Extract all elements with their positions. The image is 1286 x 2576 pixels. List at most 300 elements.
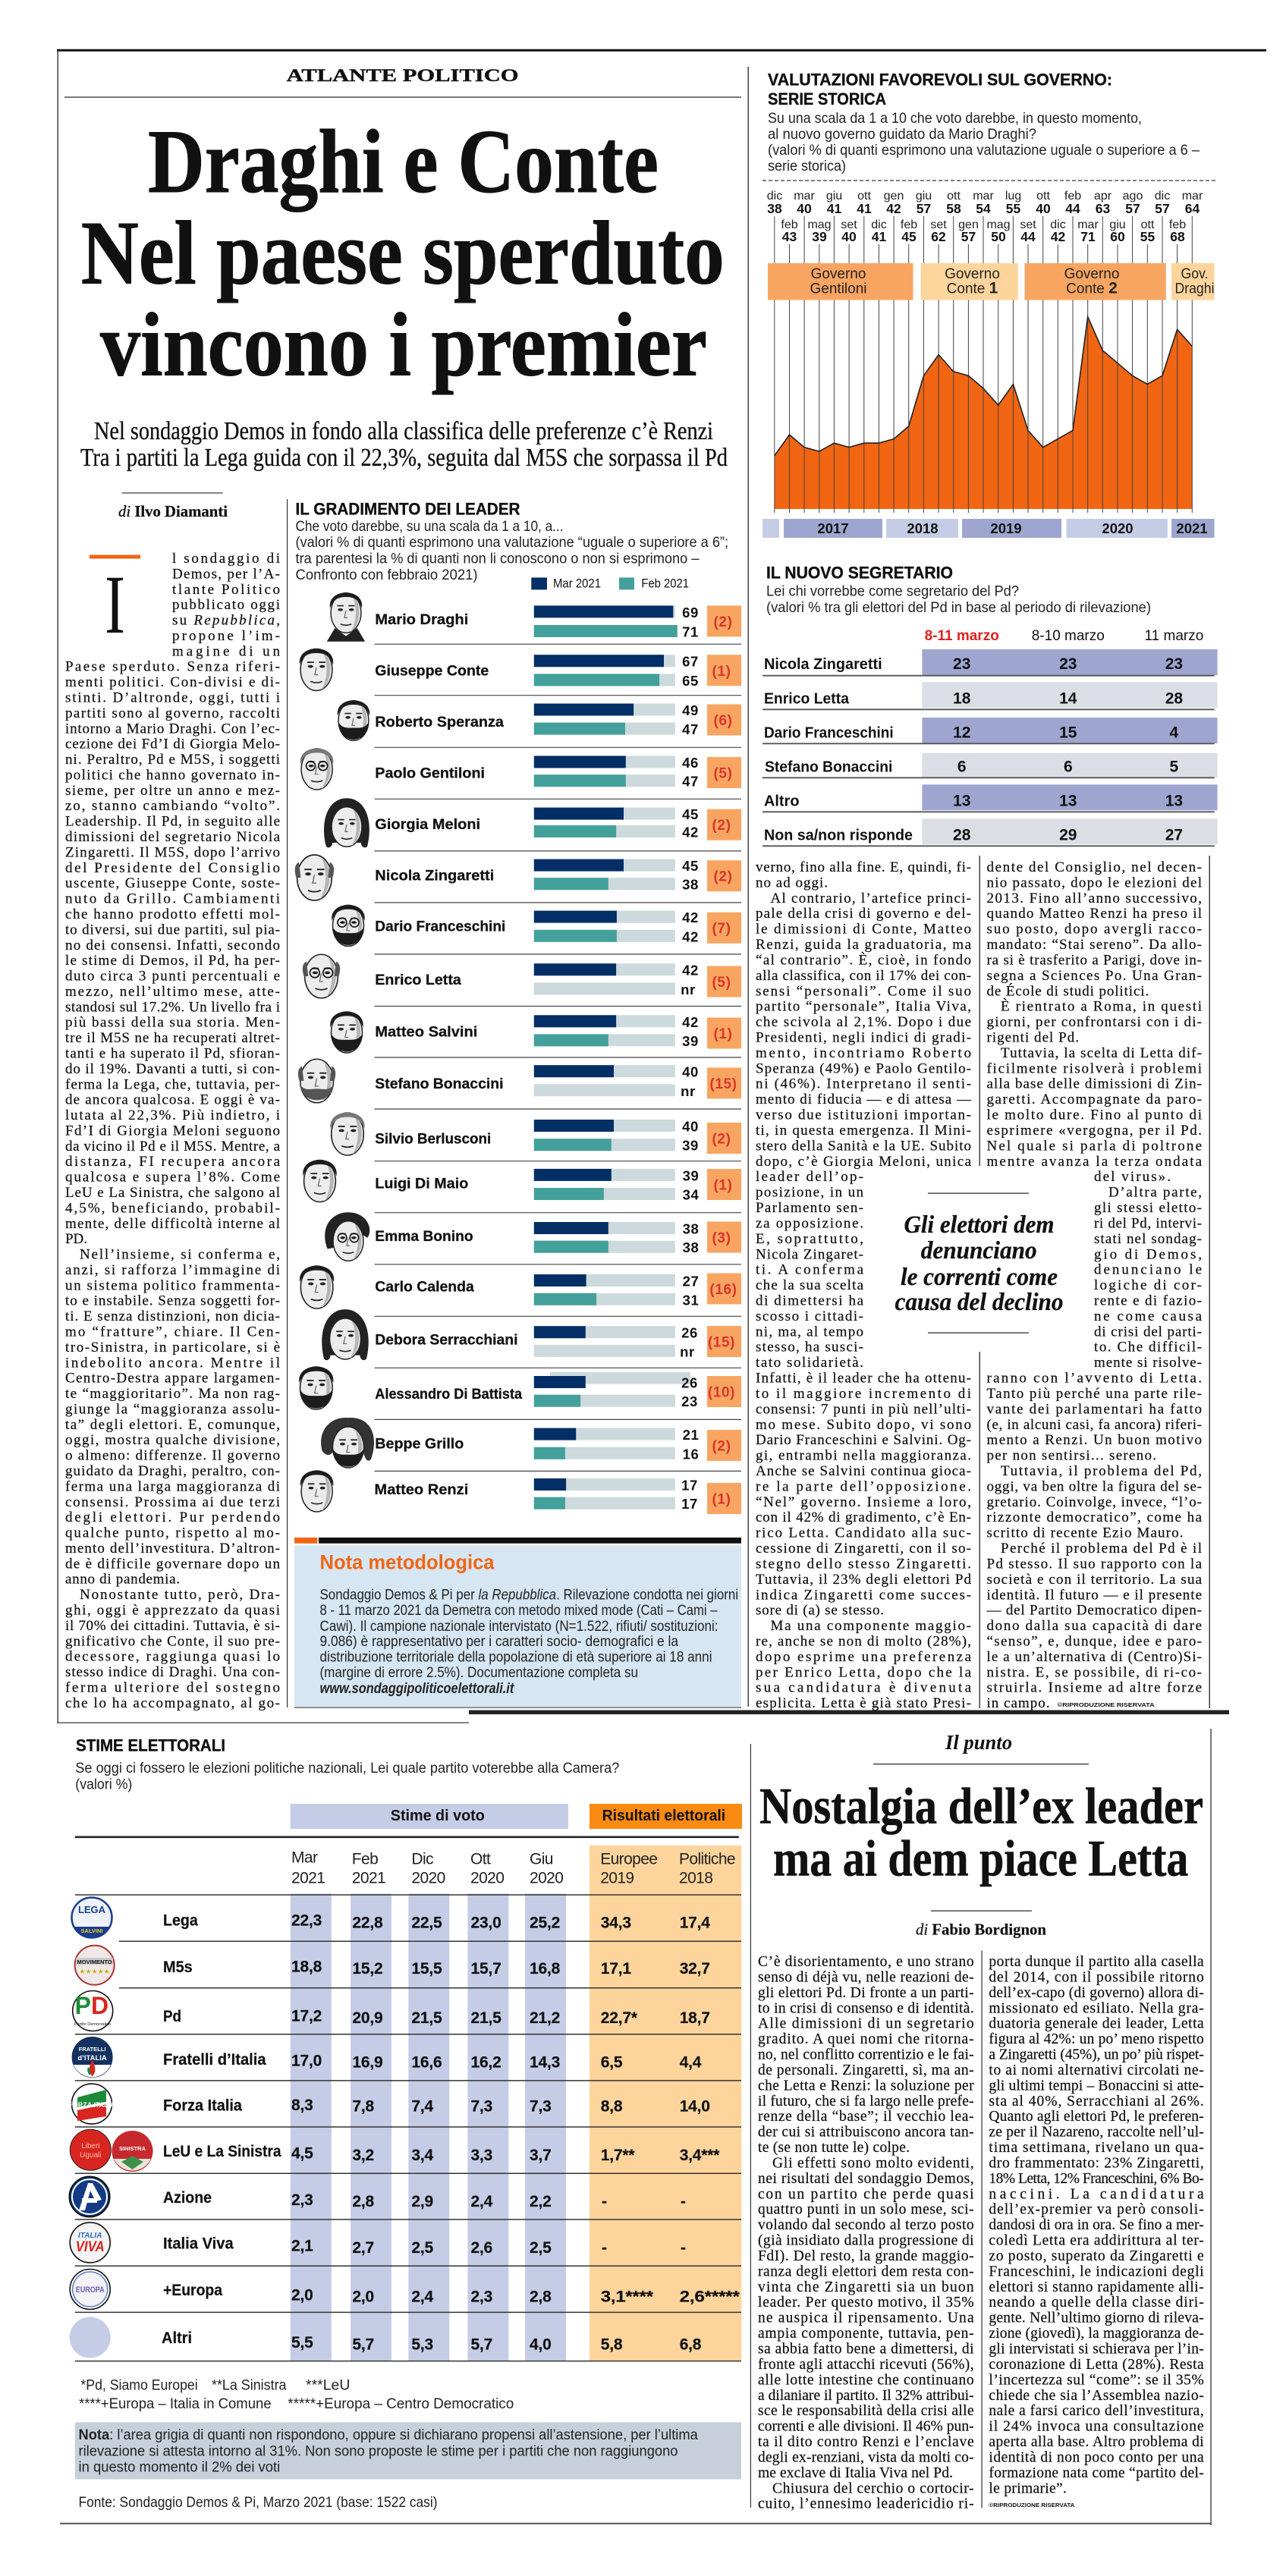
article text: Diamanti column: tro-Sinistra, in particolare, si è xyxy=(65,1340,280,1356)
row: Alessandro Di Battista xyxy=(299,1366,741,1419)
row: M5s: M5s xyxy=(163,1959,193,1976)
article text: second column: ti, in questa emergenza. Il Mini- xyxy=(756,1123,971,1139)
row: Stefano Bonaccini: 5 xyxy=(1170,758,1179,775)
article text: Bordignon right column: to ai nomi alternativi circolati ne- xyxy=(989,2062,1204,2078)
icon: portrait Conte xyxy=(300,649,333,690)
row: Dario Franceschini: (7) xyxy=(712,921,731,937)
month and value labels xyxy=(767,190,1203,244)
row: Dario Franceschini xyxy=(764,724,1179,741)
nota text: Cawi). Il campione nazionale intervistato (N=1.522, rifiuti/ sostituzioni: xyxy=(320,1619,718,1635)
icon: logo M5s xyxy=(75,1946,115,1985)
row: Matteo Salvini xyxy=(330,1011,741,1057)
month and value labels: 55 xyxy=(1140,229,1155,244)
legend: Feb 2021 xyxy=(641,576,689,590)
article text: Bordignon left column: a dilaniare il partito. Il 32% attribui- xyxy=(758,2388,974,2404)
icon: logo M5s: ★★★★★ xyxy=(79,1968,110,1975)
article text: second column: ni (46%). Interpretano il senti- xyxy=(756,1076,971,1092)
article text: third column: to. Che difficil- xyxy=(1094,1340,1202,1356)
article text: Diamanti column: consensi. Prossima ai due terzi xyxy=(65,1494,280,1510)
copyright note: ©RIPRODUZIONE RISERVATA xyxy=(1058,1701,1155,1708)
row: Enrico Letta: Enrico Letta xyxy=(375,972,461,988)
row: Pd: 21,2 xyxy=(530,2009,560,2027)
nota heading: Nota metodologica xyxy=(320,1550,495,1573)
month and value labels: 41 xyxy=(827,201,841,216)
row: Paolo Gentiloni: Paolo Gentiloni xyxy=(375,765,485,781)
article text: Diamanti column: ghi, oggi è apprezzato da quasi xyxy=(65,1603,280,1619)
icon: logo +Europa: EUROPA xyxy=(76,2285,105,2295)
article text: third column: oggi, va ben oltre la figura del se- xyxy=(986,1478,1202,1494)
row: Alessandro Di Battista: 26 xyxy=(681,1374,698,1391)
article text: second column: alla classifica, con il 17% dei con- xyxy=(756,968,971,984)
row: LeU e La Sinistra: 3,4*** xyxy=(680,2147,720,2164)
icon: portrait Salvini xyxy=(330,1011,363,1053)
article text: Bordignon left column: volando dal secondo al terzo posto xyxy=(758,2217,974,2233)
article text: Diamanti column: Zingaretti. Il M5S, dopo l’arrivo xyxy=(65,844,280,860)
article text: Bordignon left column: gradito. A quei nomi che ritorna- xyxy=(758,2031,974,2047)
chart description: al nuovo governo guidato da Mario Draghi? xyxy=(768,127,1036,143)
article text: Bordignon left column: de personali. Zingaretti, sì, ma an- xyxy=(758,2062,974,2078)
row: +Europa: +Europa xyxy=(163,2282,222,2299)
row: Altri: 6,8 xyxy=(680,2336,702,2354)
article text: third column: quando Matteo Renzi ha preso il xyxy=(986,906,1202,922)
article text: second column: Tuttavia, il 23% degli elettori Pd xyxy=(756,1572,971,1588)
row: Altri: 5,5 xyxy=(291,2334,313,2351)
government bands: Conte 2 xyxy=(1066,280,1118,297)
article text: Diamanti column: no dei consensi. Infatti, secondo xyxy=(65,938,280,953)
article text: Bordignon right column: gli ultimi tempi – Bonaccini si atte- xyxy=(989,2078,1204,2094)
row: +Europa: 3,1**** xyxy=(601,2288,654,2305)
row: Forza Italia xyxy=(68,2084,710,2124)
row: Luigi Di Maio xyxy=(303,1160,741,1213)
article text: third column: ne come causa xyxy=(1094,1308,1203,1324)
article text: third column: mente si risolve- xyxy=(1094,1355,1202,1371)
article text: Bordignon left column: cuito, l’ennesimo leadericidio ri- xyxy=(758,2496,974,2512)
row: Stefano Bonaccini xyxy=(298,1059,741,1109)
row: Forza Italia: 7,8 xyxy=(352,2098,375,2116)
year bands: 2020 xyxy=(1102,520,1134,536)
row: Matteo Renzi: Matteo Renzi xyxy=(375,1481,468,1498)
column strips xyxy=(291,1846,741,2361)
row: Lega: 23,0 xyxy=(470,1914,502,1931)
footnotes: **La Sinistra xyxy=(212,2378,287,2394)
government bands: Conte 1 xyxy=(947,280,998,297)
column heads xyxy=(291,1849,735,1887)
article text: Diamanti column: zo, stanno cambiando “volto”. xyxy=(65,798,280,814)
table description: Se oggi ci fossero le elezioni politiche nazionali, Lei quale partito voterebbe alla Camera? xyxy=(75,1761,619,1776)
article text: Bordignon left column: correnti e alle divisioni. Il 46% pun- xyxy=(758,2419,974,2435)
article text: second column: re la parte dell’opposizione. xyxy=(756,1478,971,1494)
row: Carlo Calenda: Carlo Calenda xyxy=(375,1279,474,1296)
article text: second column: che scivola al 2,1%. Dopo i due xyxy=(756,1014,971,1030)
month and value labels: feb xyxy=(901,218,917,231)
article text: second column: gi, entrambi nella maggioranza. xyxy=(756,1448,971,1464)
article text: third column: mento a Renzi. Un buon motivo xyxy=(986,1432,1202,1448)
row: Mario Draghi xyxy=(327,592,741,644)
row: Matteo Renzi: 17 xyxy=(681,1478,698,1493)
row: Roberto Speranza: 47 xyxy=(682,721,699,737)
row: Pd: Pd xyxy=(163,2008,181,2025)
row: +Europa: 2,6***** xyxy=(680,2288,740,2305)
column heads: 2018 xyxy=(679,1869,712,1887)
row: Pd: 22,7* xyxy=(601,2009,638,2027)
month and value labels: ott xyxy=(857,190,871,203)
icon: logo Italia Viva: ITALIA xyxy=(78,2232,102,2240)
article text: Diamanti column: do il 19%. Davanti a tutti, si con- xyxy=(65,1061,280,1077)
column heads: Feb xyxy=(352,1851,378,1868)
row: Lega: 25,2 xyxy=(530,1914,560,1931)
article text: Diamanti column: che hanno prodotto effetti mol- xyxy=(65,906,280,922)
month and value labels: mag xyxy=(807,218,832,231)
panel: stime elettorali xyxy=(68,1736,742,2511)
row: Nicola Zingaretti xyxy=(764,655,1183,673)
chart description: (valori % di quanti esprimono una valutazione uguale o superiore a 6 – xyxy=(768,143,1200,159)
row: Alessandro Di Battista: 23 xyxy=(681,1393,698,1409)
article text: second column: ni, ma, al tempo xyxy=(756,1324,863,1340)
panel description: (valori % di quanti esprimono una valutazione “uguale o superiore a 6”; xyxy=(296,535,728,551)
article text: Diamanti column: LeU e La Sinistra, che salgono al xyxy=(65,1185,280,1201)
row: M5s: 15,5 xyxy=(411,1960,442,1978)
row: LeU e La Sinistra xyxy=(70,2129,720,2172)
month and value labels: 57 xyxy=(961,229,976,244)
article text: third column: Perché il problema del Pd è il xyxy=(1001,1541,1202,1557)
article text: Diamanti column: anzi, si rafforza l’immagine di xyxy=(65,1262,280,1278)
row: Altro: 13 xyxy=(953,792,970,809)
icon: portrait Draghi xyxy=(327,592,365,642)
row: Azione: - xyxy=(602,2193,607,2210)
article text: Diamanti column: propone l’im- xyxy=(172,628,280,644)
year bands xyxy=(762,519,1215,538)
table column heads: 8-10 marzo xyxy=(1032,628,1105,644)
article text: second column: mo mese. Subito dopo, vi sono xyxy=(756,1417,971,1433)
row: Lega xyxy=(71,1898,710,1938)
month and value labels: gen xyxy=(958,218,979,231)
row: Italia Viva: - xyxy=(602,2239,607,2257)
row: Azione: 2,2 xyxy=(530,2193,552,2210)
icon: logo Fratelli d'Italia: d’ITALIA xyxy=(77,2054,107,2062)
row: LeU e La Sinistra: 3,3 xyxy=(470,2147,492,2164)
column heads: 2020 xyxy=(470,1869,504,1887)
row: Paolo Gentiloni: 47 xyxy=(682,774,699,790)
row: Alessandro Di Battista: (10) xyxy=(708,1385,735,1400)
row: Matteo Salvini: 42 xyxy=(682,1014,699,1030)
row: Enrico Letta xyxy=(764,690,1183,707)
article text: Diamanti column: Leadership. Il Pd, in seguito alle xyxy=(65,814,280,830)
article text: third column: dono dalla sua capacità di dare xyxy=(986,1618,1202,1634)
row: Fratelli d'Italia: 4,4 xyxy=(680,2054,702,2072)
article text: third column: di crisi del parti- xyxy=(1094,1324,1202,1340)
icon: logo Italia Viva: VIVA xyxy=(76,2239,105,2255)
table column heads: 8-11 marzo xyxy=(925,628,999,644)
article text: Bordignon right column: dro frammentato: 23% Zingaretti, xyxy=(989,2155,1204,2171)
copyright note: ©RIPRODUZIONE RISERVATA xyxy=(989,2502,1075,2508)
article text: second column: Speranza (49%) e Paolo Gentilo- xyxy=(756,1060,971,1076)
row: Dario Franceschini: 12 xyxy=(953,724,970,741)
article text: Diamanti column: stinti. D’altronde, oggi, tutti i xyxy=(65,690,280,706)
article text: second column: indica Zingaretti come succes- xyxy=(756,1587,971,1603)
article text: third column: società e con il territorio. La sua xyxy=(986,1572,1203,1588)
article text: Bordignon right column: naccini. La candidatura xyxy=(989,2186,1204,2202)
row: Enrico Letta: 28 xyxy=(1165,690,1183,707)
article text: second column: mento, incontriamo Roberto xyxy=(756,1045,971,1061)
month and value labels: 54 xyxy=(976,201,991,216)
icon: portrait Renzi xyxy=(300,1470,333,1512)
row: Stefano Bonaccini: 6 xyxy=(1064,758,1073,775)
article text: second column: Presidenti, negli indici di gradi- xyxy=(756,1030,971,1046)
article text: Bordignon right column: ze per il Nazareno, raccolte nell’ul- xyxy=(989,2125,1204,2141)
article text: Diamanti column: lutata al 22,3%. Più indietro, i xyxy=(65,1107,280,1123)
article text: second column: Anche se Salvini continua gioca- xyxy=(756,1463,971,1479)
article text: Bordignon left column: fronte agli attacchi ricevuti (56%), xyxy=(758,2357,974,2373)
row: Paolo Gentiloni: (5) xyxy=(713,766,733,781)
article text: Diamanti column: ferma una larga maggioranza di xyxy=(65,1478,280,1494)
icon: portrait Letta xyxy=(303,954,340,998)
icon: logo Liberi e Uguali xyxy=(70,2129,111,2170)
row: M5s: 15,2 xyxy=(352,1960,382,1978)
article text: Diamanti column: ferma ulteriore del sostegno xyxy=(65,1679,280,1695)
article text: Diamanti column: tlante Politico xyxy=(172,582,280,598)
month and value labels: ott xyxy=(947,190,961,203)
article text: Diamanti column: magine di un xyxy=(172,643,281,659)
article text: third column: Tanto più perché una parte rile- xyxy=(986,1386,1202,1402)
article text: third column: scritto di recente Ezio Mauro. xyxy=(986,1525,1184,1541)
article text: third column: È rientrato a Roma, in questi xyxy=(1001,998,1202,1015)
article text: Bordignon right column: sta al 40%, Serracchiani al 26%. xyxy=(989,2094,1204,2109)
row: Carlo Calenda: 31 xyxy=(683,1292,699,1308)
row: Forza Italia: Forza Italia xyxy=(163,2097,242,2115)
article text: second column: sore di (a) se stesso. xyxy=(756,1603,884,1619)
row: Roberto Speranza xyxy=(338,700,741,747)
article text: Bordignon right column: dell’ex-premier va però consoli- xyxy=(989,2202,1204,2218)
month and value labels: 42 xyxy=(1051,229,1065,244)
icon: logo Pd: P xyxy=(75,1992,91,2019)
icon: portrait Grillo xyxy=(321,1418,374,1468)
row: Azione: 2,9 xyxy=(411,2193,433,2210)
article text: Bordignon left column: no, nel conflitto correntizio e le fai- xyxy=(758,2047,974,2063)
row: Stefano Bonaccini: Stefano Bonaccini xyxy=(375,1076,504,1092)
row: Debora Serracchiani xyxy=(322,1309,741,1368)
article text: second column: dopo esprime una preferenza xyxy=(756,1649,972,1665)
month and value labels: 64 xyxy=(1185,201,1200,216)
icon: portrait Franceschini xyxy=(332,905,365,946)
note box xyxy=(75,2422,741,2479)
article text: Diamanti column: su Repubblica, xyxy=(172,613,280,629)
article text: Diamanti column: l sondaggio di xyxy=(172,551,280,567)
icon: logo Lega: SALVINI xyxy=(80,1927,103,1934)
row: Giorgia Meloni xyxy=(324,798,741,851)
article text: Bordignon right column: Franceschini, le indicazioni degli xyxy=(989,2263,1204,2279)
article text: second column: di dimettersi ha xyxy=(756,1293,864,1308)
article text: Bordignon right column: porta dunque il partito alla casella xyxy=(989,1954,1204,1970)
panel: valutazioni favorevoli sul governo xyxy=(762,71,1215,538)
article text: Diamanti column: duto circa 3 punti percentuali e xyxy=(65,969,280,985)
row: LeU e La Sinistra: 3,4 xyxy=(411,2147,434,2164)
table description xyxy=(766,584,1151,616)
icon: logo Lega xyxy=(71,1898,112,1938)
row: M5s: 15,7 xyxy=(470,1960,502,1978)
icon: portrait Calenda xyxy=(300,1265,334,1308)
article text: second column: E, soprattutto, xyxy=(756,1231,863,1247)
row: Italia Viva: 2,1 xyxy=(291,2238,313,2255)
row: Alessandro Di Battista: Alessandro Di Battista xyxy=(375,1386,522,1403)
footnotes: ****+Europa – Italia in Comune xyxy=(79,2396,272,2412)
article text: third column: gio di Demos, xyxy=(1094,1246,1202,1262)
article text: Diamanti column: guidato da Draghi, peraltro, con- xyxy=(65,1463,280,1479)
article text: Diamanti column: ti. E senza distinzioni, non dicia- xyxy=(65,1308,280,1324)
row: Silvio Berlusconi: 39 xyxy=(682,1138,699,1154)
article text: Diamanti column: mezzo, nell’ultimo mese, atte- xyxy=(65,984,280,1000)
row: Silvio Berlusconi xyxy=(330,1112,741,1161)
article text: third column: 2013. Fino all’anno successivo, xyxy=(986,891,1202,906)
nota text: 9.086) è rappresentativo per i caratteri socio- demografici e la xyxy=(320,1634,678,1650)
row: +Europa: 2,0 xyxy=(352,2288,374,2305)
article text: Bordignon right column: zo posto, superato da Zingaretti e xyxy=(989,2248,1204,2264)
article text: second column: Al contrario, l’artefice princi- xyxy=(771,891,971,906)
month and value labels: 58 xyxy=(946,201,961,216)
article text: Diamanti column: indebolito ancora. Mentre il xyxy=(65,1355,280,1371)
government bands: Governo xyxy=(1064,266,1119,282)
row: Paolo Gentiloni: 46 xyxy=(682,755,699,771)
month and value labels: 43 xyxy=(782,229,797,244)
article text: second column: cessione di Zingaretti, con il so- xyxy=(756,1541,971,1557)
month and value labels: 57 xyxy=(1155,201,1170,216)
row: Non sa/non risponde: 27 xyxy=(1165,826,1183,843)
article text: Diamanti column: un sistema politico frammenta- xyxy=(65,1277,280,1293)
row: LeU e La Sinistra: 3,2 xyxy=(352,2147,374,2164)
row: Azione: 2,3 xyxy=(291,2191,313,2209)
row: Non sa/non risponde: 29 xyxy=(1059,826,1077,843)
note box: Nota: l’area grigia di quanti non rispondono, oppure si dichiarano propensi all’astensione, per l’ultima xyxy=(79,2427,698,2443)
icon: Altri disc xyxy=(70,2317,111,2358)
article text: Bordignon left column: leader. Per questo motivo, il 35% xyxy=(758,2295,974,2311)
article text: third column: giorni, per confrontarsi con i di- xyxy=(986,1014,1202,1030)
row: Giorgia Meloni: (2) xyxy=(712,818,731,834)
month and value labels: 38 xyxy=(767,201,782,216)
row: +Europa: 2,0 xyxy=(291,2287,313,2304)
article text: Bordignon left column: quattro punti in un solo mese, sci- xyxy=(758,2202,974,2218)
article text: Diamanti column: Fd’I di Giorgia Meloni seguono xyxy=(65,1123,280,1139)
icon: portrait Berlusconi xyxy=(330,1112,365,1155)
article text: third column: Pd stesso. Il suo rapporto con la xyxy=(986,1556,1203,1572)
row: Matteo Salvini: (1) xyxy=(713,1026,733,1042)
article text: second column: stero della Sanità e la UE. Subito xyxy=(756,1138,971,1154)
row: +Europa: 2,8 xyxy=(530,2288,552,2305)
article text: second column: “al contrario”. È, cioè, in fondo xyxy=(756,951,971,968)
row: Matteo Renzi xyxy=(300,1470,741,1514)
icon: logo Italia Viva xyxy=(70,2223,110,2263)
article text: second column: sensi “personali”. Come il suo xyxy=(756,983,971,999)
chart description xyxy=(768,111,1200,174)
table heading: IL NUOVO SEGRETARIO xyxy=(766,564,953,583)
row: Beppe Grillo: Beppe Grillo xyxy=(375,1435,464,1452)
article text: Diamanti column: mo “fratture”, chiare. Il Cen- xyxy=(65,1324,280,1340)
article text: third column: denunciano le xyxy=(1094,1262,1202,1278)
article text: third column: le molto dure. Fino al punto di xyxy=(986,1107,1202,1123)
footnotes: ***LeU xyxy=(306,2378,350,2394)
legend: Mar 2021 xyxy=(553,576,601,590)
row: Nicola Zingaretti: Nicola Zingaretti xyxy=(764,656,882,673)
article text: Bordignon right column: coronazione di Letta (28%). Resta xyxy=(989,2357,1204,2373)
panel description: tra parentesi la % di quanti non li conoscono o non si esprimono – xyxy=(296,551,700,567)
icon: portrait Zingaretti xyxy=(295,855,334,900)
panel description xyxy=(296,519,728,583)
table heading: STIME ELETTORALI xyxy=(76,1736,225,1755)
column heads: 2020 xyxy=(530,1869,563,1887)
row: M5s xyxy=(75,1946,710,1985)
month and value labels: giu xyxy=(826,190,842,203)
row: Mario Draghi: Mario Draghi xyxy=(375,611,468,628)
row: Enrico Letta xyxy=(303,954,741,1006)
article text: Bordignon left column: te (se non tutte le) colpe. xyxy=(758,2140,910,2156)
article text: Bordignon right column: duatoria generale dei leader, Letta xyxy=(989,2016,1204,2032)
article text: Diamanti column: partiti sono al governo, raccolti xyxy=(65,705,280,721)
article text: second column: consensi: 7 punti in più nell’ulti- xyxy=(756,1401,971,1417)
row: Non sa/non risponde xyxy=(764,826,1183,843)
main headline: Nel paese sperduto xyxy=(81,202,725,303)
nota text: (margine di errore 2.5%). Documentazione completa su xyxy=(320,1665,638,1681)
table column heads xyxy=(925,628,1203,644)
panel: nota metodologica xyxy=(294,1538,741,1708)
article text: Bordignon right column: del 2014, con il possibile ritorno xyxy=(989,1969,1204,1985)
month and value labels: mar xyxy=(794,190,815,203)
callout: pull quote xyxy=(895,1192,1064,1334)
row: Italia Viva: - xyxy=(681,2239,686,2257)
article text: Bordignon right column: coledì Letta era addirittura al ter- xyxy=(989,2233,1204,2249)
article text: Bordignon left column: ta il dito contro Renzi e l’enclave xyxy=(758,2434,974,2450)
month and value labels: giu xyxy=(1109,218,1126,231)
row: Italia Viva: 2,7 xyxy=(352,2239,374,2257)
row: Silvio Berlusconi: 40 xyxy=(682,1118,699,1135)
row: Giuseppe Conte xyxy=(300,649,741,696)
article text: Diamanti column: te “maggioritario”. Ma non rag- xyxy=(65,1386,280,1402)
article text: third column: le a un’alternativa di (Centro)Si- xyxy=(986,1649,1202,1665)
month and value labels: 40 xyxy=(797,201,812,216)
row: Fratelli d'Italia: 16,9 xyxy=(352,2054,382,2072)
byline: Fabio Bordignon: di Fabio Bordignon xyxy=(916,1921,1046,1939)
column heads: Mar xyxy=(291,1849,318,1867)
article text: third column: mandato: “Stai sereno”. Da allo- xyxy=(986,937,1202,953)
row: Stefano Bonaccini xyxy=(765,758,1179,775)
icon: logo Liberi e Uguali: Liberi xyxy=(81,2142,100,2150)
row: Stefano Bonaccini: (15) xyxy=(709,1076,737,1092)
main headline: vincono i premier xyxy=(100,294,707,394)
article text: Diamanti column: distanza, FI recupera ancora xyxy=(65,1154,281,1170)
article text: Bordignon left column: ampia componente, tuttavia, pen- xyxy=(758,2326,974,2342)
article text: third column: vante dei parlamentari ha fatto xyxy=(986,1401,1202,1417)
article text: Bordignon left column: (già insidiato dalla progressione di xyxy=(758,2233,974,2249)
row: Enrico Letta: 18 xyxy=(953,690,971,707)
byline: Ilvo Diamanti: di Ilvo Diamanti xyxy=(118,502,228,520)
row: Debora Serracchiani: (15) xyxy=(708,1335,735,1350)
article text: third column: (e, in alcuni casi, fa ancora) riferi- xyxy=(986,1417,1202,1433)
icon: logo Lega: LEGA xyxy=(78,1904,106,1915)
article text: Diamanti column: sieme, per oltre un anno e mez- xyxy=(65,783,280,799)
article text: third column: dente del Consiglio, nel decen- xyxy=(986,859,1202,875)
article text: third column: de École di studi politici. xyxy=(986,982,1149,999)
kicker: Il punto: Il punto xyxy=(945,1731,1012,1754)
panel: il nuovo segretario xyxy=(762,564,1218,846)
icon: logo M5s: MOVIMENTO xyxy=(77,1959,112,1965)
row: Emma Bonino xyxy=(325,1212,741,1264)
article text: second column: no ad oggi. xyxy=(756,875,828,891)
month and value labels: dic xyxy=(871,218,887,231)
month and value labels: giu xyxy=(916,190,932,203)
month and value labels: 55 xyxy=(1006,201,1020,216)
row: Fratelli d'Italia: 16,6 xyxy=(411,2054,442,2072)
article text: Bordignon left column: degli ex-renziani, vista da molti co- xyxy=(758,2449,974,2465)
row: Forza Italia: 7,3 xyxy=(530,2098,552,2116)
row: Dario Franceschini: Dario Franceschini xyxy=(764,724,894,741)
month and value labels: dic xyxy=(1050,218,1066,231)
